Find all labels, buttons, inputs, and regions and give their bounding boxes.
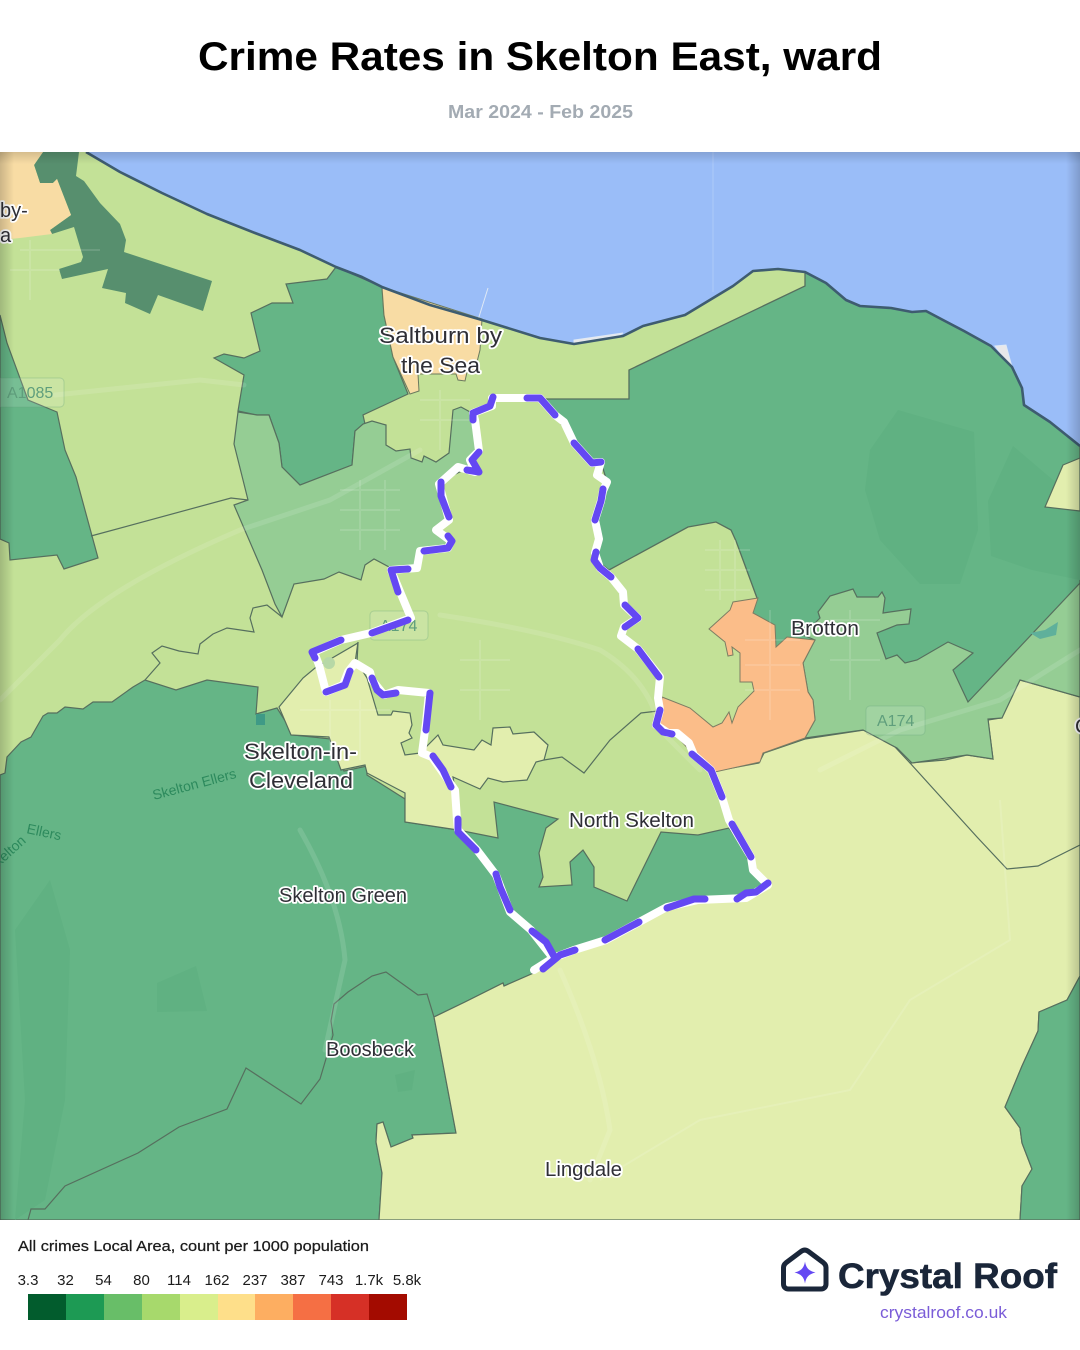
- legend tick labels: 237: [242, 1272, 268, 1289]
- label: Lingdale: Lingdale: [545, 1159, 622, 1181]
- map panel: [0, 152, 1080, 1220]
- road label A174 west: [370, 611, 428, 640]
- ward boundary purple dashes: [312, 397, 768, 969]
- icon: house with star: [784, 1250, 826, 1289]
- region: green far west: [0, 315, 98, 569]
- label: Skelton-in-Cleveland: [244, 739, 357, 793]
- legend tick labels: 162: [204, 1272, 230, 1289]
- roads: [0, 380, 1080, 1180]
- label: Boosbeck: Boosbeck: [326, 1039, 415, 1061]
- label: Redcar partial left: a: [0, 225, 12, 247]
- logo: Crystal Roof: [784, 1250, 1057, 1322]
- region: mid green Brotton: [803, 583, 1080, 763]
- legend tick labels: 5.8k: [393, 1272, 422, 1289]
- map edge shading: [0, 152, 1080, 1220]
- woodland shading east: [1079, 512, 1080, 580]
- legend colour bar: [28, 1294, 407, 1320]
- label: Skelton Ellers stream 1: Skelton Ellers: [151, 765, 238, 803]
- region: coastal green east: [540, 272, 1080, 702]
- boundary east lime: [910, 763, 1080, 869]
- legend tick labels: [18, 1272, 422, 1289]
- region: mid green west: [234, 407, 477, 617]
- legend tick labels: 743: [318, 1272, 344, 1289]
- label: North Skelton: North Skelton: [569, 810, 694, 832]
- boundaries between light green areas: [91, 498, 658, 773]
- legend tick labels: 80: [133, 1272, 150, 1289]
- label: Redcar partial left: by-: [0, 200, 28, 222]
- label: Skelton-in-Cleveland: Skelton-in-: [244, 739, 357, 764]
- region: pale orange north west: [0, 152, 71, 240]
- legend tick labels: 387: [280, 1272, 306, 1289]
- legend tick labels: 54: [95, 1272, 112, 1289]
- legend tick labels: 3.3: [18, 1272, 38, 1289]
- logo wordmark: Crystal Roof: [838, 1257, 1057, 1296]
- label: Skelton-in-Cleveland: Cleveland: [249, 768, 353, 793]
- label: Saltburn by the Sea: [379, 323, 502, 378]
- legend tick labels: 114: [167, 1272, 191, 1289]
- legend tick labels: 32: [57, 1272, 74, 1289]
- region: green south east corner: [1005, 976, 1080, 1220]
- region: dark green north west: [34, 152, 212, 314]
- woodland shading south west: [15, 1219, 16, 1220]
- sea: [88, 152, 1080, 444]
- title: Crime Rates in Skelton East, ward: [198, 35, 882, 79]
- road label A1085: [0, 378, 64, 407]
- subtitle: date range: Mar 2024 - Feb 2025: [448, 102, 633, 122]
- residential street grids: [10, 240, 1010, 1180]
- label: Brotton: Brotton: [791, 618, 859, 640]
- reservoir icon west: [256, 714, 265, 725]
- label: Ellers stream 2 end: Ellers: [25, 820, 63, 843]
- region: green Saltburn: [214, 267, 408, 485]
- place labels: [0, 200, 1080, 1181]
- label: Saltburn by the Sea: the Sea: [401, 353, 481, 378]
- faint sea line: [712, 152, 714, 292]
- region: pale lime east edge: [1045, 458, 1080, 511]
- interior boundary Boosbeck: [28, 972, 434, 1220]
- pond: [323, 657, 335, 669]
- legend tick labels: 1.7k: [355, 1272, 384, 1289]
- road label A174 west: A174: [380, 618, 417, 635]
- logo url: crystalroof.co.uk: [880, 1304, 1008, 1322]
- region: large green south west: [0, 680, 768, 1220]
- land base: light green areas: [0, 152, 953, 900]
- region: lime Skelton-in-Cleveland: [279, 643, 548, 830]
- sand strips and pier: [478, 288, 1012, 367]
- label: Skelton Green: Skelton Green: [279, 885, 407, 907]
- road label A174 east: [866, 706, 925, 735]
- region: pale orange Saltburn: [382, 287, 482, 394]
- legend: [18, 1238, 422, 1320]
- road label A1085: A1085: [7, 385, 53, 402]
- label: Saltburn by the Sea: Saltburn by: [379, 323, 502, 348]
- road label A174 east: A174: [877, 713, 914, 730]
- label: Redcar partial left: [0, 200, 28, 247]
- water feature: [1030, 622, 1058, 639]
- region: orange Brotton high crime: [655, 598, 815, 772]
- region: lime south east: [376, 680, 1080, 1220]
- coast line: [86, 152, 1080, 446]
- ward boundary white base: [314, 398, 768, 970]
- legend title: All crimes Local Area, count per 1000 population: [18, 1238, 369, 1255]
